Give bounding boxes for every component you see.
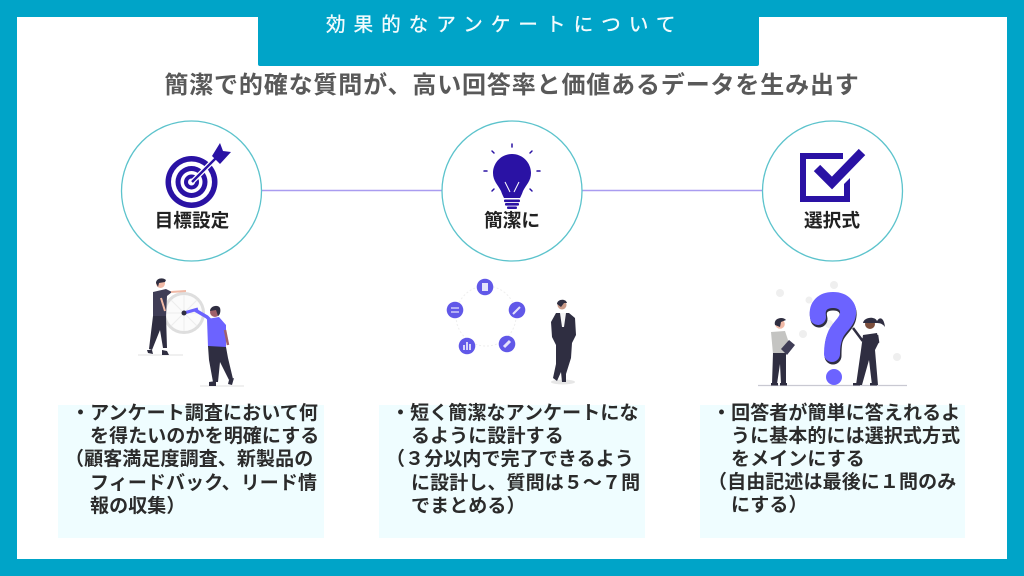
text block: goal setting: ・アンケート調査において何 xyxy=(71,403,318,424)
label: multiple choice: 選択式 xyxy=(804,210,860,231)
panel: goal setting text xyxy=(58,405,324,538)
text block: multiple choice: うに基本的には選択式方式 xyxy=(731,426,960,447)
text block: concise: （３分以内で完了できるよう xyxy=(386,449,634,470)
text block: concise: でまとめる） xyxy=(411,496,526,517)
right person xyxy=(195,306,234,386)
text block: goal setting: 報の収集） xyxy=(90,496,186,517)
feature icon: hammer xyxy=(509,302,525,318)
title: 効果的なアンケートについて xyxy=(326,14,683,36)
label: goal setting: 目標設定 xyxy=(155,210,229,231)
text block: goal setting: フィードバック、リード情 xyxy=(90,473,317,494)
text block: multiple choice: ・回答者が簡単に答えれるよ xyxy=(712,403,960,424)
left person with tablet xyxy=(771,318,795,386)
text block: goal setting: （顧客満足度調査、新製品の xyxy=(65,449,313,470)
text block: goal setting: を得たいのかを明確にする xyxy=(90,426,319,447)
text block: goal setting xyxy=(65,402,319,517)
standing man xyxy=(551,300,576,384)
panel: multiple choice text xyxy=(700,405,965,538)
text block: multiple choice: をメインにする xyxy=(731,449,865,470)
feature icon: arrows xyxy=(447,302,463,318)
text block: concise: ・短く簡潔なアンケートにな xyxy=(391,403,639,424)
text block: multiple choice: （自由記述は最後に１問のみ xyxy=(708,472,956,493)
right person with ponytail xyxy=(853,318,885,386)
feature icon: document xyxy=(477,279,493,295)
text block: concise: に設計し、質問は５～７問 xyxy=(411,473,640,494)
dart xyxy=(184,309,198,313)
question mark xyxy=(818,300,848,385)
subtitle: 簡潔で的確な質問が、高い回答率と価値あるデータを生み出す xyxy=(164,72,860,99)
left person xyxy=(147,278,186,355)
text block: multiple choice: にする） xyxy=(731,495,808,516)
panel: concise text xyxy=(379,405,645,538)
text block: multiple choice xyxy=(708,402,960,516)
title banner xyxy=(258,0,759,66)
text block: concise: るように設計する xyxy=(411,426,564,447)
feature icon: bar chart xyxy=(459,338,475,354)
feature icon: rocket xyxy=(499,336,515,352)
text block: concise xyxy=(386,402,640,517)
label: concise: 簡潔に xyxy=(484,210,540,231)
